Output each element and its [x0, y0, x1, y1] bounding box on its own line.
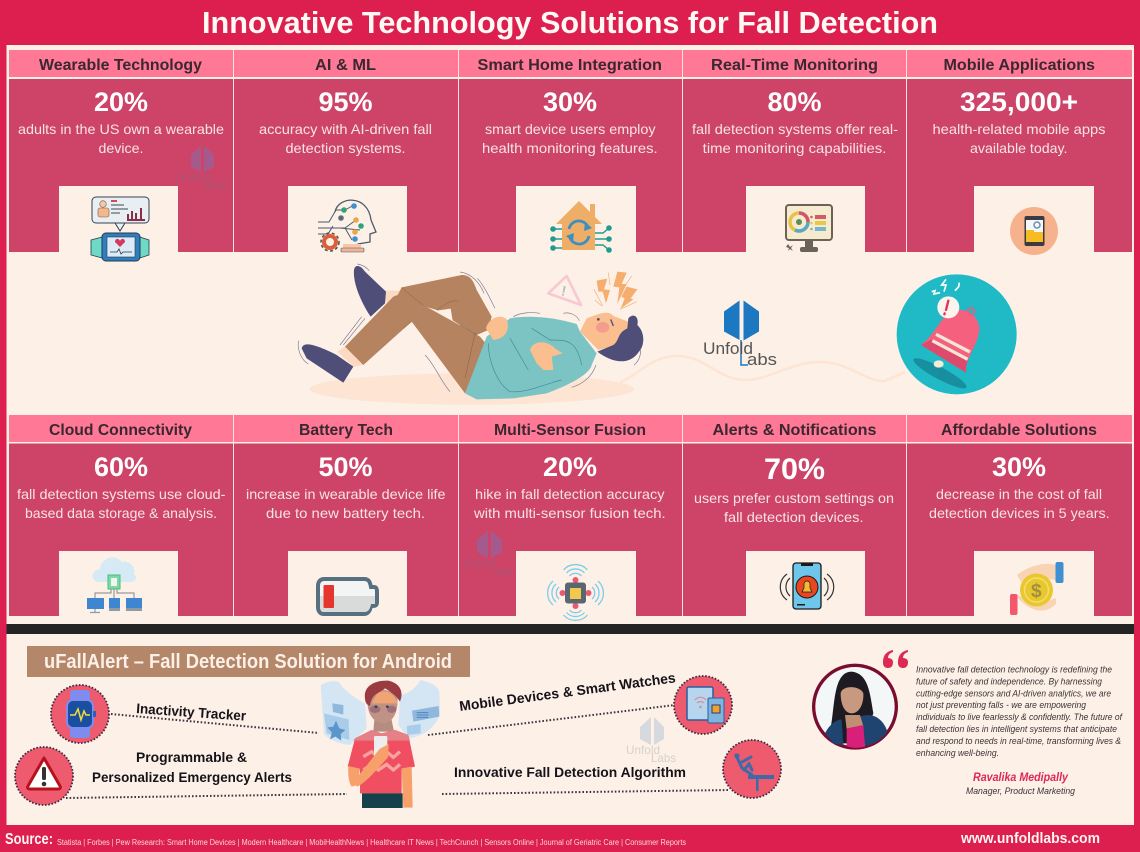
panel: Real-Time Monitoring: fall detection systems offer real- — [692, 121, 898, 137]
panel: Mobile Applications: 325,000+ — [960, 87, 1078, 117]
watermark: Unfold Labs lower: abs — [495, 566, 513, 578]
panel: Battery Tech: due to new battery tech. — [266, 505, 425, 521]
panel: Affordable Solutions: detection devices in 5 years. — [929, 505, 1110, 521]
illustration: alarm bell — [897, 274, 1017, 394]
panel: Affordable Solutions: Affordable Solutions — [941, 422, 1097, 439]
testimonial author: Manager, Product Marketing — [966, 786, 1076, 797]
icon: phone alert bell — [780, 563, 834, 609]
watermark: Unfold Labs top left: Unfold — [176, 172, 210, 184]
icon: monitor dashboard — [786, 205, 832, 252]
footer sources — [5, 831, 686, 848]
panel: Wearable Technology: Wearable Technology — [39, 57, 202, 74]
panel: Smart Home Integration: Smart Home Integration — [478, 57, 662, 74]
decorative wave line — [620, 356, 905, 382]
icon: multi-sensor chip — [548, 565, 603, 620]
footer sources: Source: — [5, 831, 53, 848]
panel: AI & ML: AI & ML — [315, 57, 376, 74]
footer website: www.unfoldlabs.com — [960, 831, 1100, 847]
panel: Multi-Sensor Fusion: Multi-Sensor Fusion — [494, 422, 646, 439]
section heading bar: uFallAlert — [27, 646, 470, 677]
panel: Mobile Applications — [932, 57, 1106, 255]
testimonial text: enhancing well-being. — [916, 748, 999, 759]
feature: Mobile Devices & Smart Watches: Mobile Devices & Smart Watches — [458, 669, 677, 714]
panel: Multi-Sensor Fusion: hike in fall detection accuracy — [475, 486, 664, 502]
illustration: person with phone and holographic screens — [321, 680, 440, 808]
icon: phone app — [1010, 207, 1058, 255]
testimonial text: cutting-edge sensors and AI-driven analytics, we are — [916, 688, 1111, 700]
icon: wearable watch with data bubble — [91, 197, 149, 261]
icon: hands with coin — [1010, 562, 1064, 615]
testimonial portrait — [814, 665, 896, 748]
icon: hands with coin: $ — [1031, 581, 1042, 602]
panel: AI & ML — [259, 57, 432, 252]
section heading bar: uFallAlert: uFallAlert – Fall Detection Solution for Android — [44, 651, 452, 673]
testimonial text: not just preventing falls - we are empowering — [916, 700, 1087, 711]
icon: low battery — [318, 579, 377, 614]
panel: Wearable Technology — [18, 57, 224, 261]
panel: AI & ML: detection systems. — [286, 140, 406, 156]
testimonial text: Innovative fall detection technology is redefining the — [916, 664, 1112, 676]
panel: Wearable Technology: adults in the US own a wearable — [18, 121, 224, 137]
panel: Battery Tech: increase in wearable device life — [246, 486, 446, 502]
panel: Mobile Applications: Mobile Applications — [944, 57, 1095, 74]
dotted connector lines — [66, 705, 730, 798]
illustration: fallen man — [298, 264, 643, 405]
testimonial author — [966, 772, 1076, 797]
title: Innovative Technology Solutions for Fall Detection — [202, 5, 938, 40]
panel: Wearable Technology: 20% — [94, 87, 148, 117]
illustration: fallen man: ! — [560, 282, 568, 299]
panel: Smart Home Integration — [478, 57, 662, 253]
watermark: Unfold Labs bottom: Labs — [651, 751, 676, 765]
panel: Mobile Applications: health-related mobile apps — [932, 121, 1106, 137]
panel: Cloud Connectivity: 60% — [94, 452, 148, 482]
panel: Affordable Solutions: decrease in the cost of fall — [936, 486, 1102, 502]
testimonial text: future of safety and independence. By harnessing — [916, 676, 1103, 688]
panel: AI & ML: 95% — [318, 87, 372, 117]
panel: Alerts & Notifications: 70% — [764, 453, 825, 486]
panel: Real-Time Monitoring: 80% — [768, 87, 822, 117]
panel: Alerts & Notifications — [694, 422, 894, 609]
feature: Innovative Fall Detection Algorithm: Innovative Fall Detection Algorithm — [454, 764, 686, 780]
panel: Alerts & Notifications: fall detection devices. — [724, 509, 864, 525]
panel: Battery Tech: 50% — [318, 452, 372, 482]
panel: Wearable Technology: device. — [98, 140, 144, 156]
panel: Alerts & Notifications: users prefer custom settings on — [694, 490, 894, 506]
feature: Innovative Fall Detection Algorithm — [454, 740, 781, 798]
icon: smart watch — [51, 685, 109, 743]
icon: person falling — [723, 740, 781, 798]
feature: Programmable & Personalized Emergency Alerts — [15, 747, 292, 805]
testimonial text — [916, 664, 1123, 759]
panel: Cloud Connectivity: fall detection systems use cloud- — [17, 486, 226, 502]
panel: Real-Time Monitoring: Real-Time Monitoring — [711, 57, 878, 74]
panel: Smart Home Integration: 30% — [543, 87, 597, 117]
testimonial author: Ravalika Medipally — [973, 772, 1069, 784]
feature: Programmable & Personalized Emergency Alerts: Personalized Emergency Alerts — [92, 769, 292, 785]
icon: tablet and phone — [674, 676, 732, 734]
panel: Real-Time Monitoring: time monitoring capabilities. — [703, 140, 886, 156]
quote mark — [883, 650, 908, 668]
icon: AI head with gear — [318, 200, 376, 252]
watermark: Unfold Labs lower: Unfold — [463, 558, 496, 570]
testimonial text: fall detection lies in intelligent systems that anticipate — [916, 724, 1117, 735]
black divider bar — [6, 624, 1134, 634]
testimonial text: and respond to needs in real-time, transforming lives & — [916, 736, 1121, 747]
footer sources: Statista | Forbes | Pew Research: Smart Home Devices | Modern Healthcare | MobiHealthNews | Healthcare IT News | TechCrunch | Sensors Online | Journal of Geriatric Care | Consumer Reports — [57, 838, 686, 847]
logo: Unfold Labs: abs — [747, 350, 777, 369]
panel: Battery Tech — [246, 422, 446, 614]
panel: Cloud Connectivity: based data storage & analysis. — [25, 505, 217, 521]
panel: Multi-Sensor Fusion: 20% — [543, 452, 597, 482]
panel: Smart Home Integration: health monitoring features. — [482, 140, 658, 156]
top row of statistic bands — [9, 50, 1132, 252]
panel: Multi-Sensor Fusion: with multi-sensor fusion tech. — [473, 505, 666, 521]
panel: Multi-Sensor Fusion — [473, 422, 666, 620]
logo: Unfold Labs: Unfold — [703, 339, 753, 358]
icon: warning triangle — [15, 747, 73, 805]
feature: Inactivity Tracker: Inactivity Tracker — [136, 700, 247, 724]
panel: Mobile Applications: available today. — [970, 140, 1068, 156]
panel: Alerts & Notifications: Alerts & Notifications — [712, 422, 877, 439]
logo: Unfold Labs — [703, 300, 777, 369]
panel: Cloud Connectivity: Cloud Connectivity — [49, 422, 192, 439]
watermark: Unfold Labs lower — [463, 531, 513, 578]
panel: Cloud Connectivity — [17, 422, 226, 612]
panel: AI & ML: accuracy with AI-driven fall — [259, 121, 432, 137]
testimonial text: individuals to live fearlessly & confidently. The future of — [916, 712, 1123, 723]
bottom row of statistic bands — [9, 415, 1132, 616]
feature: Programmable & Personalized Emergency Alerts: Programmable & — [136, 749, 247, 765]
watermark: Unfold Labs bottom — [626, 717, 676, 765]
panel: Affordable Solutions: 30% — [992, 452, 1046, 482]
watermark: Unfold Labs bottom: Unfold — [626, 743, 660, 757]
panel: Smart Home Integration: smart device users employ — [485, 121, 656, 137]
panel: Real-Time Monitoring — [692, 57, 898, 252]
icon: smart home — [550, 201, 612, 253]
feature: Mobile Devices & Smart Watches — [458, 669, 732, 734]
watermark: Unfold Labs top left — [176, 146, 227, 192]
panel: Battery Tech: Battery Tech — [299, 422, 393, 439]
watermark: Unfold Labs top left: abs — [204, 180, 227, 192]
feature: Inactivity Tracker — [51, 685, 247, 743]
panel: Affordable Solutions — [929, 422, 1110, 615]
icon: cloud network — [87, 557, 142, 612]
